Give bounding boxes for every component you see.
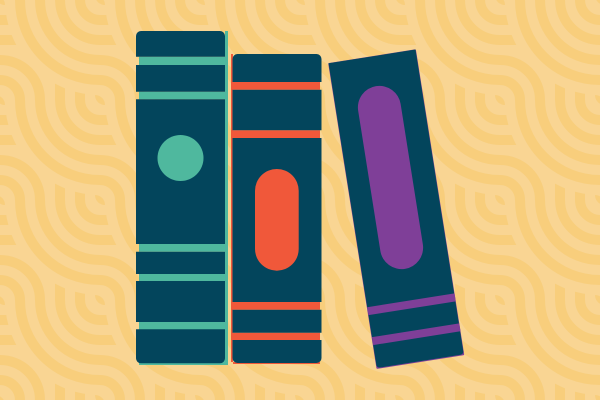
book 1 back cover and spine edge bbox=[139, 31, 228, 365]
book 2: red bbox=[231, 54, 322, 364]
book 2 pill emblem bbox=[255, 169, 299, 271]
book 3 pill emblem bbox=[355, 83, 426, 272]
book 3: purple, leaning bbox=[328, 49, 464, 369]
book 2 spine segments bbox=[232, 54, 322, 363]
book 3 back cover bbox=[328, 49, 464, 369]
book 1 circle emblem bbox=[158, 135, 204, 181]
book 3 spine bbox=[329, 50, 464, 368]
book 3 stripes bbox=[367, 293, 456, 315]
book 1: teal bbox=[136, 31, 228, 365]
book 1 spine segments bbox=[136, 31, 225, 363]
book 2 back cover and stripes bbox=[231, 54, 320, 364]
